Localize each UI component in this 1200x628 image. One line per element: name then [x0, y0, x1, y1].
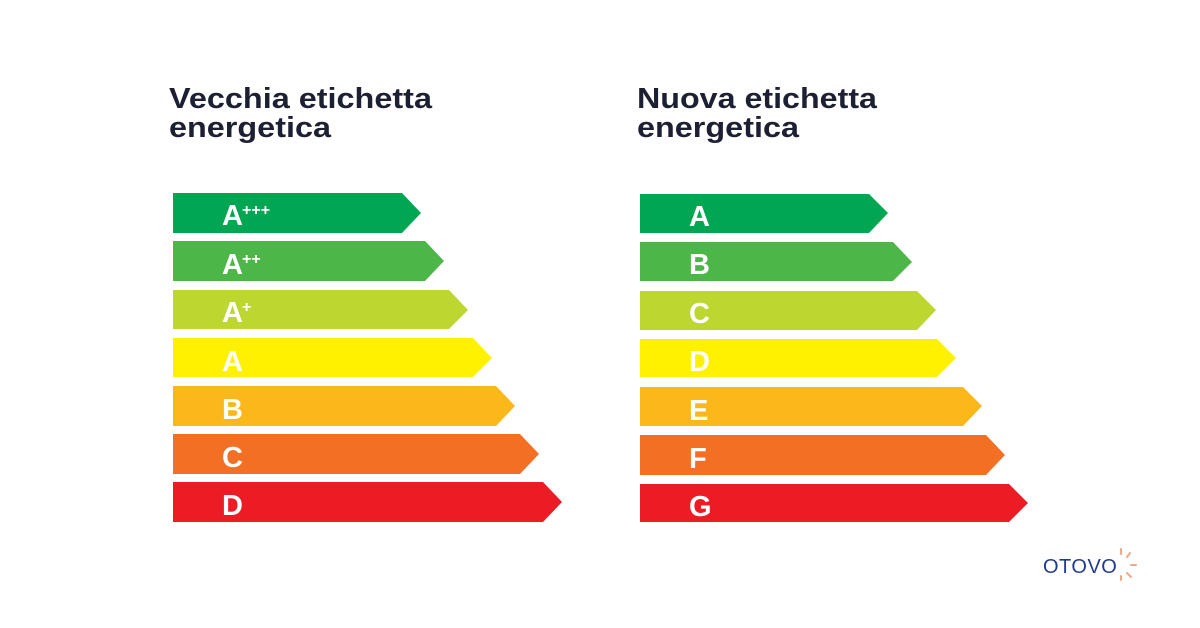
bar C: [640, 291, 936, 330]
bar A: [173, 338, 492, 378]
bar A+++: [173, 193, 421, 233]
bar A+++: A: [222, 200, 243, 232]
logo: OTOVO: OTOVO: [1043, 556, 1117, 578]
icon: sun rays: [1121, 549, 1136, 580]
bar C: C: [689, 298, 710, 330]
bar A: A: [222, 346, 243, 378]
bar B: [640, 242, 912, 281]
title: old label: Vecchia etichetta: [169, 83, 433, 115]
bar A++: [173, 241, 444, 281]
bar A+: +: [242, 299, 251, 316]
bar A: [640, 194, 888, 233]
bar C: [173, 434, 539, 474]
bar D: D: [689, 346, 710, 378]
bar G: G: [689, 491, 712, 523]
bar A+: [173, 290, 468, 329]
chart: new energy label: [640, 194, 1028, 523]
title: old label: [169, 83, 433, 144]
bar G: [640, 484, 1028, 523]
bar D: [173, 482, 562, 522]
bar F: [640, 435, 1005, 475]
bar B: B: [689, 249, 710, 281]
bar A++: A: [222, 249, 243, 281]
bar E: [640, 387, 982, 427]
logo: OTOVO: [1043, 549, 1136, 580]
bar C: C: [222, 442, 243, 474]
bar B: B: [222, 394, 243, 426]
title: new label: Nuova etichetta: [637, 83, 878, 115]
bar D: D: [222, 490, 243, 522]
title: new label: [637, 83, 878, 144]
bar D: [640, 339, 956, 378]
chart: old energy label: [173, 193, 562, 522]
bar B: [173, 386, 515, 426]
bar F: F: [689, 443, 707, 475]
bar E: E: [689, 395, 708, 427]
bar A+: A: [222, 297, 243, 329]
bar A++: ++: [242, 251, 261, 268]
bar A: A: [689, 201, 710, 233]
title: old label: energetica: [169, 112, 332, 144]
bar A+++: +++: [242, 202, 270, 219]
title: new label: energetica: [637, 112, 800, 144]
